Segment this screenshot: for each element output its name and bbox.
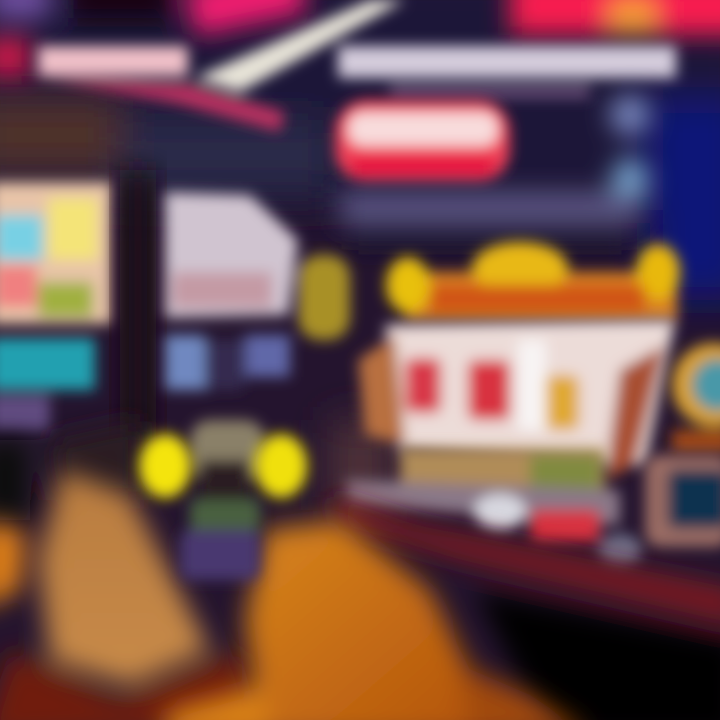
button panel: [345, 448, 642, 566]
right chair: [160, 520, 590, 720]
yellow lights: [139, 434, 307, 498]
counter and floor: [0, 420, 720, 720]
reels: [358, 320, 675, 480]
pink logo sign: [335, 100, 510, 182]
ceiling and back wall: [0, 0, 720, 510]
slot stool: [180, 420, 265, 580]
main slot machine: [345, 242, 680, 566]
top neon lights: [0, 0, 720, 76]
gold crown topper: [386, 242, 680, 320]
dark divider column: [120, 170, 156, 440]
banner: [38, 0, 676, 132]
left chair: [0, 470, 260, 720]
left slot machine: [0, 182, 112, 431]
second slot machine: [165, 192, 350, 390]
wall lights: [340, 95, 650, 246]
right round gauge: [672, 343, 720, 452]
right dark screen: [645, 455, 720, 547]
